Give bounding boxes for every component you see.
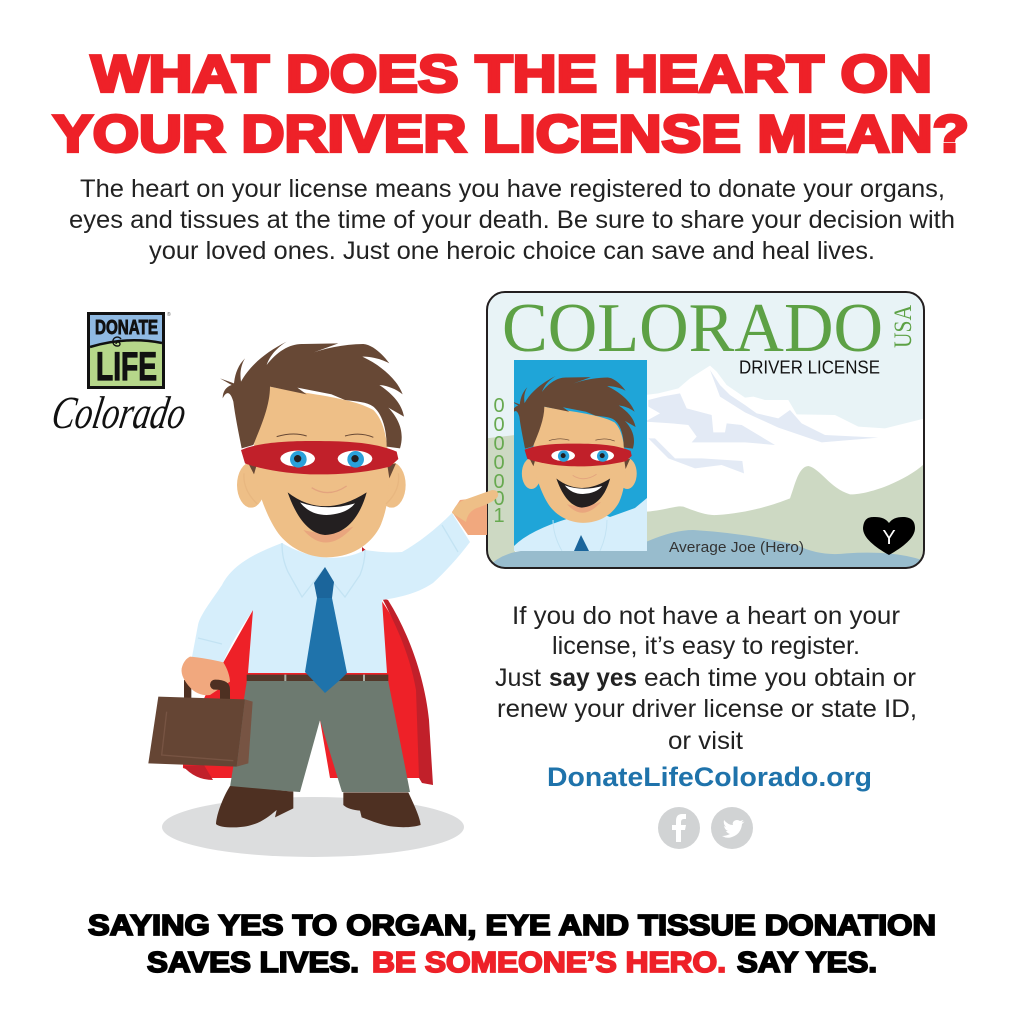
intro text block: eyes and tissues at the time of your death. Be sure to share your decision with [69, 206, 955, 234]
register text block: Just [495, 664, 541, 692]
hair [220, 342, 404, 478]
register text block: license, it’s easy to register. [552, 632, 860, 660]
head [220, 342, 406, 557]
belt [247, 675, 388, 681]
card USA label: USA [890, 305, 917, 348]
closing message: BE SOMEONE’S HERO. [372, 947, 726, 979]
card subtitle: DRIVER LICENSE [739, 356, 880, 378]
icon: donor heart [863, 517, 915, 555]
closing message: SAYING YES TO ORGAN, EYE AND TISSUE DONATION [88, 910, 936, 942]
title: YOUR DRIVER LICENSE MEAN? [53, 106, 969, 164]
closing message [88, 910, 936, 979]
id photo [510, 360, 647, 551]
eyebrows [277, 434, 373, 437]
register text block: or visit [668, 727, 743, 755]
logo: Donate Life Colorado: ® [167, 311, 171, 318]
shoes [216, 786, 421, 827]
website link: DonateLifeColorado.org [547, 762, 872, 792]
ear shading [244, 473, 399, 504]
cape [183, 545, 433, 785]
pointing hand [452, 490, 498, 535]
necktie [305, 567, 347, 693]
register text block: each time you obtain or [644, 664, 916, 692]
logo: Donate Life Colorado [48, 311, 190, 439]
briefcase and hand [148, 657, 253, 767]
card landscape [487, 366, 927, 572]
title [53, 46, 969, 164]
nose [312, 486, 347, 493]
logo: Donate Life Colorado: DONATE [95, 317, 158, 339]
license number: 0 [493, 395, 505, 417]
register text block: If you do not have a heart on your [512, 602, 900, 630]
register text block: renew your driver license or state ID, [497, 695, 917, 723]
shirt [192, 513, 470, 673]
hero character [148, 342, 498, 857]
mask [241, 441, 398, 474]
register text block [495, 602, 917, 755]
license number [493, 395, 505, 527]
ground shadow [162, 797, 464, 857]
intro text block: your loved ones. Just one heroic choice can save and heal lives. [149, 237, 875, 265]
icon: twitter [711, 807, 753, 849]
title: WHAT DOES THE HEART ON [91, 46, 932, 104]
icon: donor heart: Y [882, 527, 896, 549]
lower lip [303, 527, 353, 543]
ears [237, 462, 406, 508]
intro text block [69, 175, 955, 265]
card name: Average Joe (Hero) [669, 540, 804, 556]
mouth [288, 492, 367, 535]
license number: 0 [493, 414, 505, 436]
intro text block: The heart on your license means you have registered to donate your organs, [80, 175, 945, 203]
trousers [230, 680, 410, 792]
hair, mask, eyes [220, 342, 404, 478]
photo shirt [514, 498, 647, 551]
logo: Donate Life Colorado: Colorado [48, 388, 190, 439]
photo head [510, 376, 637, 523]
license number: 0 [493, 452, 505, 474]
logo: Donate Life Colorado: LIFE [96, 345, 157, 389]
face [253, 387, 389, 557]
license number: 0 [493, 471, 505, 493]
license number: 0 [493, 433, 505, 455]
closing message: SAY YES. [737, 947, 877, 979]
register text block: say yes [549, 664, 637, 692]
license card [487, 290, 927, 572]
eyes [280, 451, 372, 468]
license number: 0 [493, 488, 505, 510]
card heading: Colorado: COLORADO [502, 290, 883, 367]
license number: 1 [493, 505, 505, 527]
icon: facebook [658, 807, 700, 849]
closing message: SAVES LIVES. [147, 947, 359, 979]
